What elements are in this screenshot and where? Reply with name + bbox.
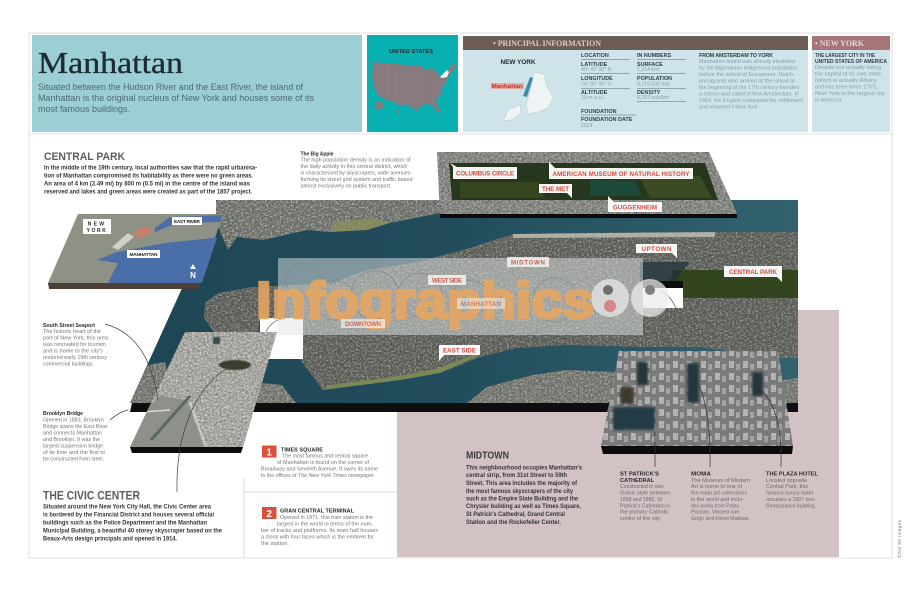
- data: location: ALTITUDE: [581, 90, 608, 96]
- text: The Civic Center: Municipal Building, a beautiful 40 storey skyscraper based on the: [43, 528, 222, 534]
- text: Times Square: of Manhattan is found on the corner of: [277, 460, 369, 466]
- text: St Patrick's Cathedral: Gothic style between: [620, 490, 670, 496]
- panel: principal information: • PRINCIPAL INFORMATION: [493, 39, 601, 48]
- text: St Patrick's Cathedral: ST PATRICK'S: [620, 472, 659, 478]
- panel: New York sidebar: New York is the largest city: [815, 91, 885, 97]
- intro text: [38, 82, 314, 115]
- civic center inset: [128, 330, 278, 453]
- text: Gran Central Terminal: [261, 507, 378, 547]
- text: Times Square: Broadway and Seventh Avenue. It owes its name: [261, 466, 378, 472]
- heading: Manhattan: Manhattan: [38, 45, 184, 80]
- text: South Street Seaport: restored early 19th century: [43, 355, 107, 361]
- text: Midtown: such as the Empire State Building and the: [466, 496, 578, 502]
- text: South Street Seaport: South Street Seaport: [43, 323, 95, 329]
- text: The Civic Center: buildings such as the Police Department and the Manhattan: [43, 520, 207, 526]
- text: The Civic Center: [43, 488, 222, 542]
- text: from Amsterdam to York: [699, 53, 804, 110]
- text: St Patrick's Cathedral: 1858 and 1865, St: [620, 497, 662, 503]
- panel: title: [32, 35, 362, 132]
- label: East Side: [439, 345, 480, 361]
- label: New York: YORK: [87, 228, 107, 234]
- label: The Met: THE MET: [542, 186, 569, 193]
- text: The Plaza Hotel: occupies a 1907 neo-: [766, 497, 816, 503]
- text: Midtown: central strip, from 31st Street to 59th: [466, 472, 567, 479]
- label: East River: EAST RIVER: [174, 219, 201, 225]
- text: MoMA: The Museum of Modern: [691, 478, 750, 484]
- text: South Street Seaport: commercial buildings.: [43, 362, 94, 368]
- text: The Plaza Hotel: Located opposite: [766, 478, 807, 484]
- panel: pink midtown background: [397, 310, 839, 557]
- label: Midtown: [507, 257, 549, 267]
- text: Gran Central Terminal: a clock with four faces which is the emblem for: [261, 534, 374, 540]
- text: Brooklyn Bridge: be constructed from steel.: [43, 456, 104, 462]
- text: Times Square: TIMES SQUARE: [281, 448, 323, 454]
- data: location: LOCATION: [581, 53, 609, 59]
- data: in numbers: IN NUMBERS: [637, 53, 672, 59]
- label: American Museum of Natural History: [549, 162, 693, 179]
- data: in numbers: [637, 53, 686, 102]
- text: from Amsterdam to York: and renamed it New York.: [699, 104, 759, 110]
- text: MoMA: in the world and inclu-: [691, 497, 744, 503]
- text: South Street Seaport: and is home to the city's: [43, 348, 103, 354]
- text: The Big Apple: the daily activity in this central district, which: [300, 164, 408, 170]
- text: South Street Seaport: port of New York, this area: [43, 336, 108, 342]
- text: Midtown: Chrysler building as well as Times Square,: [466, 503, 581, 510]
- data: location: LATITUDE: [581, 62, 608, 68]
- panel: principal information: [463, 36, 808, 132]
- watermark: Infographics: [256, 272, 594, 330]
- text: MoMA: MOMA: [691, 472, 711, 478]
- text: Brooklyn Bridge: and Brooklyn. It was the: [43, 437, 100, 443]
- text: South Street Seaport: was renovated for tourism: [42, 342, 107, 348]
- data: location: FOUNDATION: [581, 109, 617, 115]
- land: south shores: [130, 362, 798, 403]
- data: location: FOUNDATION DATE: [581, 117, 633, 123]
- text: from Amsterdam to York: 1664, the English conquered the settlement: [699, 98, 804, 104]
- text: St Patrick's Cathedral: Patrick's Cathedral is: [620, 504, 670, 510]
- text: The Plaza Hotel: famous luxury hotel: [766, 490, 813, 496]
- text: from Amsterdam to York: before the arrival of Europeans. Dutch: [699, 72, 793, 78]
- text: Gran Central Terminal: Opened in 1871, this train station is the: [280, 515, 373, 521]
- data: location: 10 m a.s.l.: [581, 95, 605, 101]
- text: Midtown: St Patrick's Cathedral, Grand Central: [466, 511, 565, 518]
- label: Guggenheim: [608, 196, 662, 212]
- data: in numbers: SURFACE: [637, 62, 663, 68]
- icon: number 1: 1: [266, 448, 272, 458]
- label: Manhattan: MANHATTAN: [461, 301, 502, 308]
- map inset: New York location: [48, 214, 223, 289]
- data: location: 74° 00' 00" O: [581, 82, 612, 88]
- text: The Big Apple: The high population density is an indication of: [300, 158, 411, 164]
- label: Downtown: [341, 319, 385, 328]
- panel: New York sidebar: Despite not actually being: [815, 65, 881, 71]
- text: from Amsterdam to York: FROM AMSTERDAM TO YORK: [699, 53, 773, 59]
- image credit: ©Sol 90 Images: [896, 519, 902, 558]
- text: Brooklyn Bridge: Brooklyn Bridge: [43, 411, 83, 417]
- label: The Met: [539, 184, 572, 198]
- panel: United States locator map: UNITED STATES: [389, 49, 433, 55]
- cut-out notches: [260, 318, 303, 359]
- panel: New York sidebar: (which is actually Albany: [815, 78, 877, 84]
- text: The Plaza Hotel: Renaissance building.: [766, 504, 816, 510]
- intro text: most famous buildings.: [38, 104, 130, 115]
- aerial view of Manhattan: [128, 200, 808, 412]
- callout lines: midtown landmarks: [655, 383, 781, 467]
- icon: number 2: 2: [266, 509, 272, 520]
- text: St Patrick's Cathedral: Constructed in neo-: [620, 484, 665, 490]
- text: The Big Apple: is characterised by skyscrapers, wide avenues: [300, 170, 411, 176]
- text: The Civic Center: THE CIVIC CENTER: [43, 488, 140, 502]
- text: Brooklyn Bridge: Opened in 1883, Brooklyn: [43, 418, 104, 424]
- text: St Patrick's Cathedral: [620, 472, 670, 522]
- text: Central Park: tion of Manhattan compromised its habitability as there were no green areas.: [44, 172, 253, 180]
- data: in numbers: 8,215,000 hab.: [637, 82, 672, 88]
- data: location: 1624: [581, 123, 593, 129]
- data: location: 40° 43' 00" N: [581, 67, 612, 73]
- midtown buildings inset: [600, 350, 795, 454]
- callout line: Brooklyn Bridge: [110, 410, 128, 420]
- label: West Side: [428, 275, 466, 285]
- Central Park green: [668, 270, 798, 298]
- text: Central Park: [44, 151, 257, 196]
- map: New York boroughs: [491, 59, 553, 121]
- map: New York boroughs: Manhattan: [492, 84, 523, 90]
- label: Downtown: DOWNTOWN: [345, 321, 382, 328]
- label: East River: [172, 217, 202, 225]
- text: The Big Apple: forming its street grid system and traffic based: [300, 177, 413, 183]
- text: MoMA: [691, 472, 750, 522]
- data: location: LONGITUDE: [581, 76, 613, 82]
- data: in numbers: 1,214 km²: [637, 67, 660, 73]
- label: Central Park: CENTRAL PARK: [729, 269, 778, 276]
- text: Midtown: This neighbourhood occupies Manhattan's: [466, 464, 582, 472]
- text: The Plaza Hotel: THE PLAZA HOTEL: [766, 472, 819, 478]
- text: Brooklyn Bridge: Bridge spans the East River: [43, 424, 108, 430]
- text: The Plaza Hotel: [766, 472, 819, 510]
- label: New York: [83, 219, 111, 234]
- text: St Patrick's Cathedral: CATHEDRAL: [620, 478, 655, 484]
- icon: north arrow: N: [190, 271, 196, 280]
- text: The Big Apple: [300, 152, 413, 190]
- water: [97, 238, 217, 283]
- text: The Civic Center: Situated around the New York City Hall, the Civic Center area: [43, 504, 211, 510]
- label: Columbus Circle: COLUMBUS CIRCLE: [456, 170, 514, 178]
- text: Midtown: [466, 450, 582, 526]
- panel: New York sidebar: • NEW YORK: [815, 39, 865, 48]
- panel: New York sidebar: and has been since 1797),: [815, 84, 878, 90]
- panel: New York sidebar: the capital of its own state: [815, 72, 881, 78]
- text: MoMA: Gogh and Henri Matisse.: [691, 516, 750, 522]
- label: Manhattan: [127, 250, 160, 258]
- intro text: Manhattan is the original nucleus of New York and houses some of its: [38, 93, 314, 104]
- panel: United States locator map: [367, 35, 458, 132]
- text: St Patrick's Cathedral: centre of the city.: [620, 516, 661, 522]
- label: East Side: EAST SIDE: [443, 348, 476, 354]
- text: Times Square: to the offices of The New York Times newspaper.: [261, 473, 375, 479]
- text: St Patrick's Cathedral: the primary Catholic: [620, 510, 669, 516]
- panel: New York sidebar: THE LARGEST CITY IN THE: [815, 53, 875, 59]
- text: Brooklyn Bridge: and connects Manhattan: [43, 430, 102, 436]
- watermark: [256, 258, 669, 335]
- text: The Civic Center: is bordered by the Financial District and houses several official: [43, 512, 214, 518]
- map: New York boroughs: NEW YORK: [500, 59, 536, 66]
- icon: US map: [372, 62, 456, 114]
- text: Gran Central Terminal: largest in the world in terms of the num-: [277, 522, 373, 528]
- label: Manhattan: [457, 298, 505, 309]
- text: Times Square: [261, 446, 378, 479]
- callout line: Civic Center: [177, 368, 227, 492]
- text: Midtown: the most famous skyscrapers of the city: [466, 488, 573, 495]
- text: Brooklyn Bridge: largest suspension bridge: [43, 444, 103, 450]
- text: MoMA: des works from Pablo: [691, 504, 739, 510]
- callout line: South Street Seaport: [105, 324, 158, 400]
- dividers: [244, 478, 397, 558]
- label: Columbus Circle: [450, 163, 517, 179]
- data: in numbers: 6,767 hab/km²: [637, 95, 670, 101]
- label: American Museum of Natural History: AMERICAN MUSEUM OF NATURAL HISTORY: [552, 171, 690, 178]
- label: Manhattan: MANHATTAN: [130, 252, 158, 258]
- text: South Street Seaport: The historic heart of the: [43, 329, 101, 335]
- text: The Big Apple: almost exclusively on public transport.: [300, 184, 392, 190]
- text: Brooklyn Bridge: [43, 411, 108, 462]
- text: South Street Seaport: [42, 323, 108, 368]
- data: location: [581, 53, 636, 129]
- text: Central Park: CENTRAL PARK: [44, 151, 125, 163]
- text: Midtown: Station and the Rockefeller Center.: [466, 519, 561, 526]
- land: New Jersey shore: [216, 200, 440, 250]
- text: Central Park: In the middle of the 19th century, local authorities saw that the rapid urbanisa-: [44, 164, 257, 172]
- text: Brooklyn Bridge: of its time and the first to: [43, 450, 105, 456]
- data: in numbers: DENSITY: [637, 90, 661, 96]
- text: Midtown: Street. This area includes the majority of: [466, 480, 578, 487]
- text: MoMA: the main art collections: [691, 490, 747, 496]
- text: The Civic Center: Beaux-Arts design principals and opened in 1914.: [43, 536, 177, 542]
- data: in numbers: POPULATION: [637, 76, 672, 82]
- central park inset: [436, 150, 738, 218]
- label: Central Park: [724, 266, 782, 282]
- text: Central Park: reserved and lakes and green areas were created as part of the 1857 project.: [44, 188, 252, 196]
- text: from Amsterdam to York: by the Algonquian indigenous population: [699, 66, 797, 72]
- dark landmark blocks: [613, 362, 763, 430]
- map labels: [341, 162, 782, 361]
- text: Gran Central Terminal: GRAN CENTRAL TERMINAL: [280, 508, 355, 514]
- label: Uptown: UPTOWN: [642, 246, 672, 253]
- panel: New York sidebar: UNITED STATES OF AMERICA: [815, 59, 887, 65]
- label: West Side: WEST SIDE: [432, 278, 462, 284]
- land: Manhattan island and Queens: [200, 228, 800, 393]
- text: Gran Central Terminal: ber of tracks and platforms. Its main hall houses: [261, 528, 378, 534]
- text: MoMA: Art is home to one of: [691, 484, 743, 490]
- label: Guggenheim: GUGGENHEIM: [613, 204, 657, 212]
- text: Midtown: MIDTOWN: [466, 450, 509, 462]
- icon: north arrow: [190, 264, 196, 280]
- text: MoMA: Picasso, Vincent van: [691, 510, 739, 516]
- text: Gran Central Terminal: the station.: [261, 541, 289, 547]
- label: New York: NEW: [88, 222, 106, 228]
- text: from Amsterdam to York: immigrants who arrived at the island at: [699, 78, 796, 84]
- text: from Amsterdam to York: a colony and called it New Amsterdam. In: [699, 92, 799, 98]
- text: Times Square: The most famous and central square: [282, 454, 368, 460]
- text: The Big Apple: The Big Apple: [300, 152, 334, 158]
- label: Uptown: [636, 244, 677, 258]
- text: The Plaza Hotel: Central Park, this: [766, 484, 808, 490]
- panel: New York sidebar: in America.: [815, 98, 843, 104]
- text: Central Park: An area of 4 km (2.49 mi) by 800 m (0.5 mi) in the centre of the island was: [44, 180, 250, 188]
- intro text: Situated between the Hudson River and the East River, the island of: [38, 82, 303, 93]
- panel: New York sidebar: [812, 36, 890, 132]
- text: from Amsterdam to York: the beginning of the 17th century founded: [699, 85, 799, 91]
- label: Midtown: MIDTOWN: [511, 260, 546, 266]
- text: from Amsterdam to York: Manhattan Island was already inhabited: [699, 59, 795, 65]
